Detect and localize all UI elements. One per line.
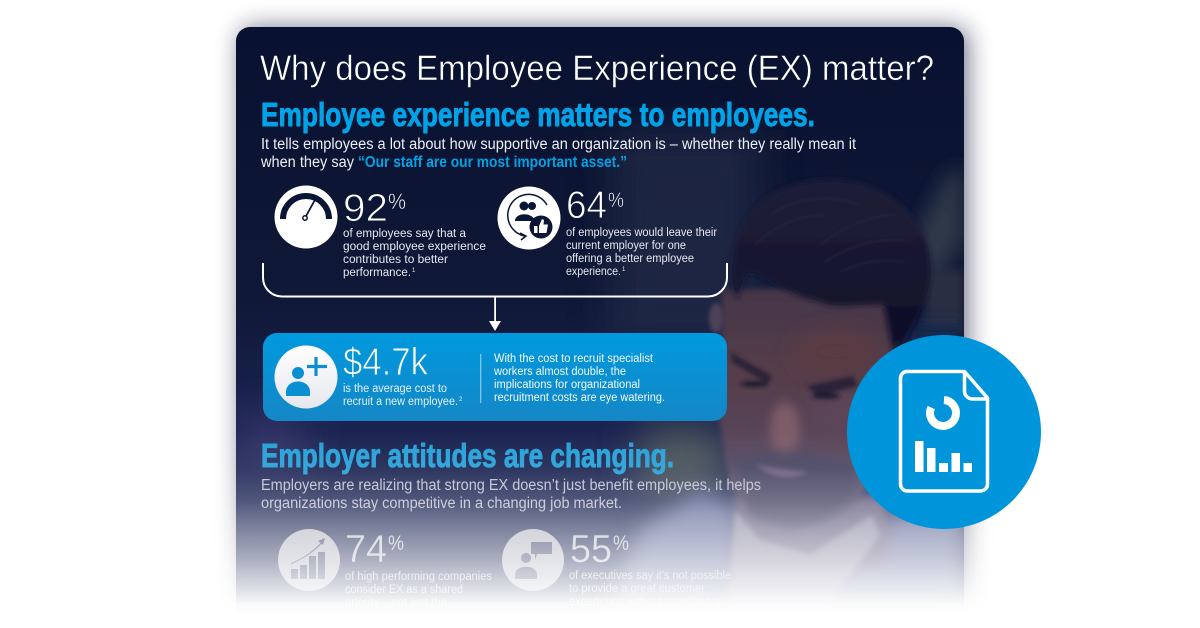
side note <box>493 353 665 404</box>
description: contributes to better <box>343 254 448 266</box>
stat: 74%: % <box>388 532 404 555</box>
stat: 92% <box>274 186 486 279</box>
description: of employees would leave their <box>566 227 717 239</box>
photo: man's neck <box>730 490 890 562</box>
intro text: “Our staff are our most important asset.” <box>358 154 627 171</box>
side note: implications for organizational <box>494 379 640 391</box>
icon: document <box>900 372 988 491</box>
photo: man's face <box>716 286 898 506</box>
number: 74 <box>345 528 387 571</box>
description: priority – not just the <box>345 597 447 609</box>
icon: page fold <box>964 372 987 399</box>
description: experience without providing a <box>569 596 721 608</box>
photo: lips <box>757 465 808 477</box>
heading: employer attitudes: Employer attitudes are changing. <box>261 437 674 474</box>
intro text: It tells employees a lot about how supportive an organization is – whether they really mean it <box>261 136 857 153</box>
icon: donut <box>930 400 956 426</box>
icon: add person <box>274 346 338 408</box>
description <box>345 571 492 609</box>
description: good employee experience <box>343 241 486 253</box>
stat: 64%: % <box>608 189 624 212</box>
stat: 55% <box>502 528 731 608</box>
description: to provide a great customer <box>569 583 705 595</box>
description: current employer for one <box>566 240 686 252</box>
icon: growth chart <box>278 529 340 591</box>
employer text: organizations stay competitive in a changing job market. <box>261 495 622 512</box>
description <box>343 383 463 408</box>
badge: report icon <box>847 335 1041 529</box>
number: $4.7k <box>343 341 428 384</box>
description: consider EX as a shared <box>345 584 463 596</box>
card shadow <box>240 27 968 627</box>
description <box>569 570 731 608</box>
description: 2 <box>459 397 463 403</box>
panel: infographic card with photo background <box>236 27 964 628</box>
number: 64 <box>566 184 607 227</box>
divider <box>480 354 481 403</box>
heading: employee experience matters: Employee experience matters to employees. <box>261 96 815 133</box>
stat: 74% <box>278 528 492 609</box>
number: 92 <box>343 187 388 230</box>
panel: recruitment cost callout <box>263 333 727 421</box>
photo: eyebrows and eyes <box>730 352 858 399</box>
description <box>566 227 717 278</box>
employer text <box>261 477 761 512</box>
side note: With the cost to recruit specialist <box>494 353 654 365</box>
arrow <box>489 297 501 331</box>
description: 1 <box>412 268 416 274</box>
number: 55 <box>570 528 612 571</box>
photo: brow warm tones <box>804 333 866 354</box>
bottom white fade <box>190 430 1020 628</box>
photo: moustache and beard <box>728 451 860 530</box>
description: experience. <box>566 266 621 278</box>
photo: cheek <box>839 402 840 403</box>
icon: gauge <box>274 186 338 248</box>
stat: 92%: % <box>388 189 406 214</box>
intro text: when they say <box>260 154 354 171</box>
bracket connector <box>263 263 727 296</box>
icon: person with speech bubble <box>502 529 564 591</box>
stat: 55%: % <box>613 532 629 555</box>
side note: recruitment costs are eye watering. <box>494 392 665 404</box>
intro text <box>260 136 857 171</box>
photo: white t-shirt <box>730 512 880 598</box>
photo: man's ear <box>709 303 723 333</box>
description: is the average cost to <box>343 383 447 395</box>
description: of high performing companies <box>345 571 492 583</box>
stat: 64% <box>498 184 717 278</box>
title: Why does Employee Experience (EX) matter? <box>260 49 934 88</box>
icon: bars <box>915 441 972 472</box>
description: recruit a new employee. <box>343 396 458 408</box>
side note: workers almost double, the <box>493 366 626 378</box>
description: performance. <box>343 267 411 279</box>
description: offering a better employee <box>566 253 694 265</box>
icon: people and thumbs up <box>498 186 560 250</box>
photo: man's hair <box>732 179 931 352</box>
description <box>343 228 486 279</box>
description: of employees say that a <box>343 228 467 240</box>
photo: blurred background tones <box>236 130 964 495</box>
description: of executives say it’s not possible <box>569 570 731 582</box>
photo: man's shirt <box>620 483 964 593</box>
photo: man's nose <box>770 402 800 458</box>
description: 1 <box>622 267 626 273</box>
employer text: Employers are realizing that strong EX doesn’t just benefit employees, it helps <box>261 477 761 494</box>
